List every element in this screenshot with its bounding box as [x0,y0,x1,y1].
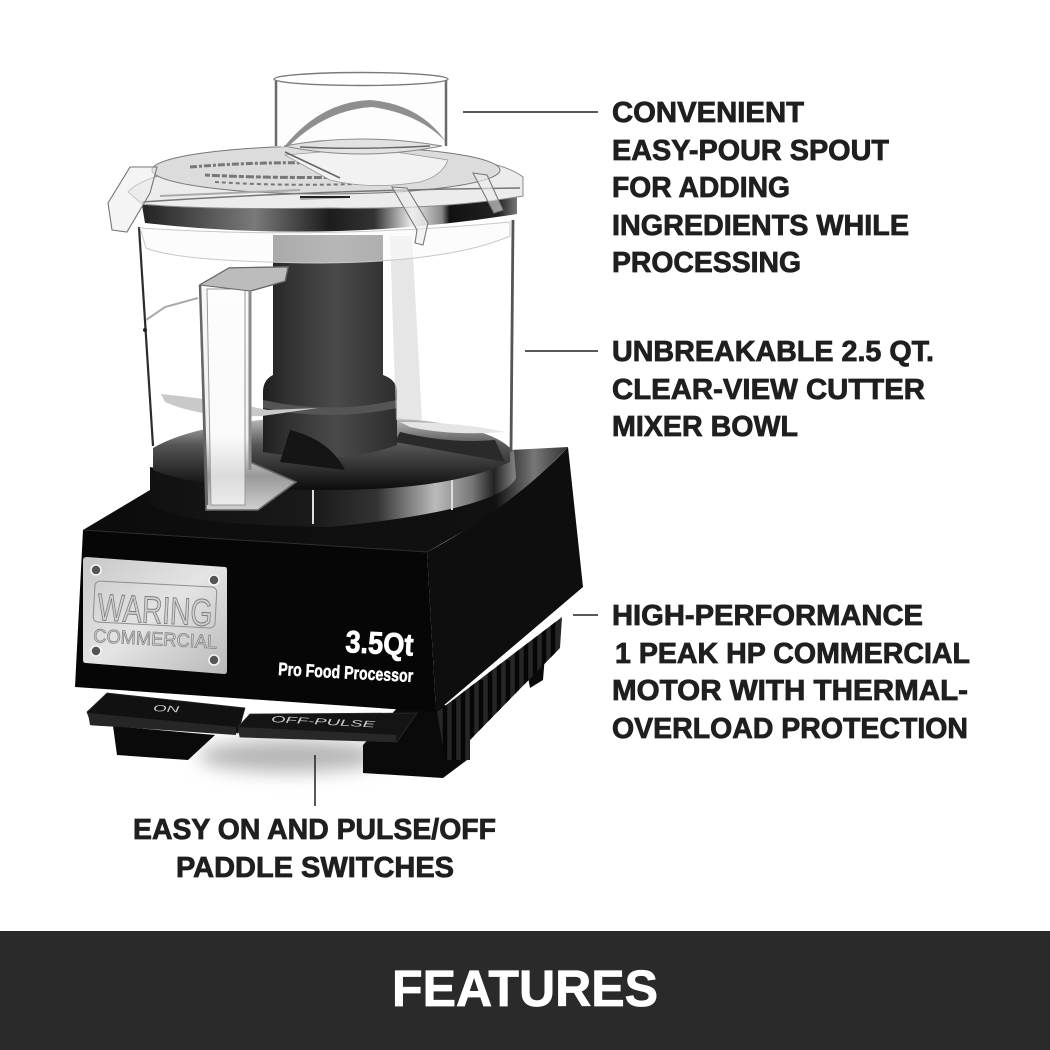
lid molded text [190,163,430,185]
motor column [263,235,397,458]
leader line: motor [573,614,598,616]
leader line: switches [314,755,316,806]
blade [161,394,318,416]
latches [108,167,503,245]
floor shadow [198,740,382,772]
bowl dark floor [153,415,510,490]
leader line: bowl [525,350,598,352]
lid [108,72,523,245]
model text: Pro Food Processor [278,659,414,686]
product photo: food processor [75,72,583,778]
lid top [152,146,500,194]
callout: motor: MOTOR WITH THERMAL- [612,675,968,707]
paddle switches: OFF-PULSE [271,714,377,730]
lid rim [128,152,523,208]
inner wall reflection [390,236,422,420]
paddle switches [87,693,417,742]
callout: paddle switches: EASY ON AND PULSE/OFF [133,814,496,846]
model text [278,624,414,686]
callout: spout: FOR ADDING [612,172,790,204]
callout: paddle switches [133,814,496,884]
base front [75,530,436,712]
paddle switches: ON [153,703,180,714]
model text: 3.5Qt [345,624,414,663]
lid highlights [142,188,520,202]
bowl [139,220,516,527]
callout: bowl: MIXER BOWL [612,411,798,443]
spout [274,72,448,154]
callout: spout [612,97,909,279]
callout: bowl [612,336,934,443]
vents [437,617,562,760]
bowl walls [139,227,153,446]
banner title: FEATURES [392,960,658,1017]
nameplate: WARING [97,587,214,635]
bowl rim [140,222,510,263]
callout: bowl: UNBREAKABLE 2.5 QT. [612,336,934,368]
feet [113,655,545,778]
callout: spout: EASY-POUR SPOUT [612,135,889,167]
callout: spout: PROCESSING [612,247,801,279]
callout: motor: 1 PEAK HP COMMERCIAL [615,638,970,670]
callout: paddle switches: PADDLE SWITCHES [176,852,454,884]
nameplate [83,557,227,674]
bowl bottom ring [150,450,516,527]
callout: bowl: CLEAR-VIEW CUTTER [612,374,925,406]
handle [200,267,296,510]
leader line: spout [463,111,598,113]
footer banner [0,931,1050,1050]
lid chrome band [142,195,517,232]
nameplate: COMMERCIAL [93,626,218,653]
base right side [427,447,583,712]
callout: motor: OVERLOAD PROTECTION [612,713,968,745]
callout: motor [612,600,970,745]
base unit [75,447,583,778]
callout: motor: HIGH-PERFORMANCE [612,600,923,632]
callout: spout: CONVENIENT [612,97,804,129]
callout: spout: INGREDIENTS WHILE [612,210,909,242]
base top surface [83,447,568,552]
